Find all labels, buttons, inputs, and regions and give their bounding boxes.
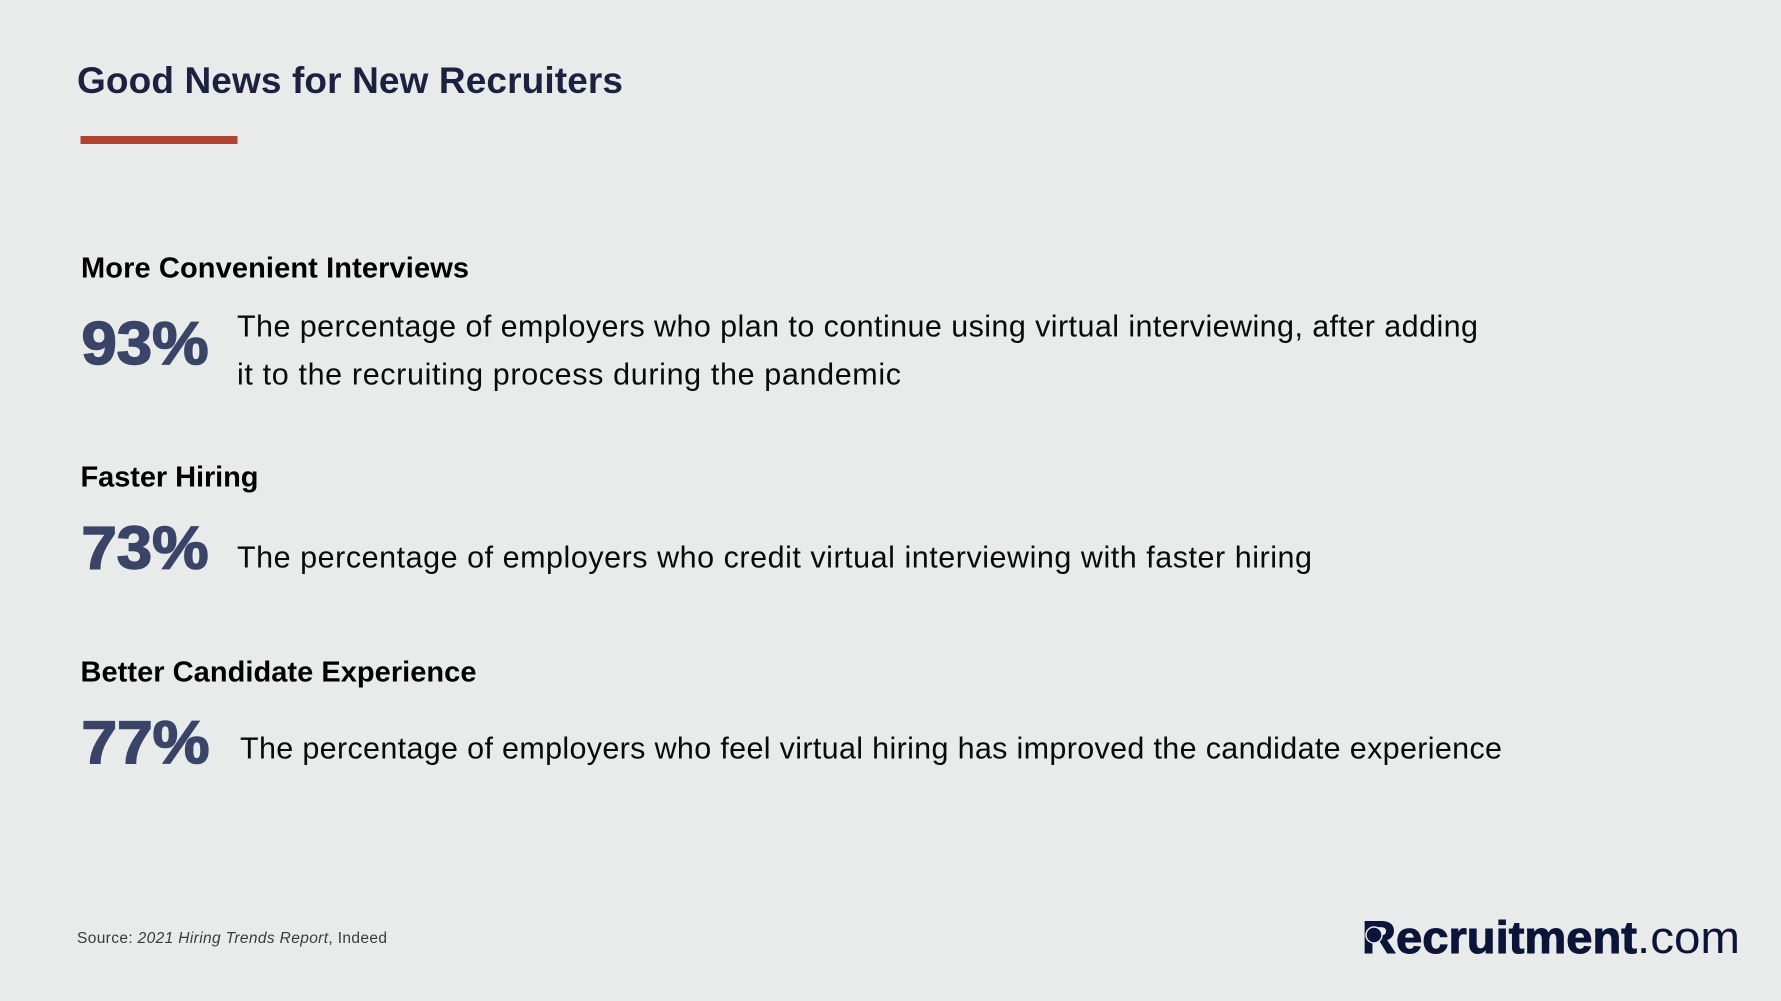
heading: more convenient interviews: More Convenient Interviews — [81, 252, 469, 284]
source note: Source: 2021 Hiring Trends Report, Indeed — [77, 930, 387, 947]
section: more convenient interviews — [81, 252, 1478, 392]
section: faster hiring — [80, 461, 1312, 582]
title: Good News for New Recruiters — [77, 60, 623, 101]
stat: 73%: 73% — [82, 514, 208, 582]
logo: Recruitment.com — [1362, 912, 1740, 963]
stat: 77%: 77% — [82, 709, 210, 776]
heading: better candidate experience: Better Candidate Experience — [80, 656, 476, 688]
logo: Recruitment.com: .com — [1637, 912, 1740, 963]
description: 93%: it to the recruiting process during the pandemic — [237, 358, 901, 392]
description: 77%: The percentage of employers who feel virtual hiring has improved the candidate experience — [240, 732, 1502, 766]
description: 93%: The percentage of employers who plan to continue using virtual interviewing, after adding — [237, 310, 1478, 344]
icon: magnifying glass in R — [1366, 927, 1385, 953]
logo: Recruitment.com: Recruitment — [1362, 912, 1637, 963]
red accent bar — [80, 136, 238, 144]
heading: faster hiring: Faster Hiring — [80, 461, 258, 493]
description: 93% — [237, 310, 1478, 392]
description: 73%: The percentage of employers who credit virtual interviewing with faster hiring — [237, 541, 1312, 575]
section: better candidate experience — [80, 656, 1502, 776]
stat: 93%: 93% — [82, 310, 208, 377]
